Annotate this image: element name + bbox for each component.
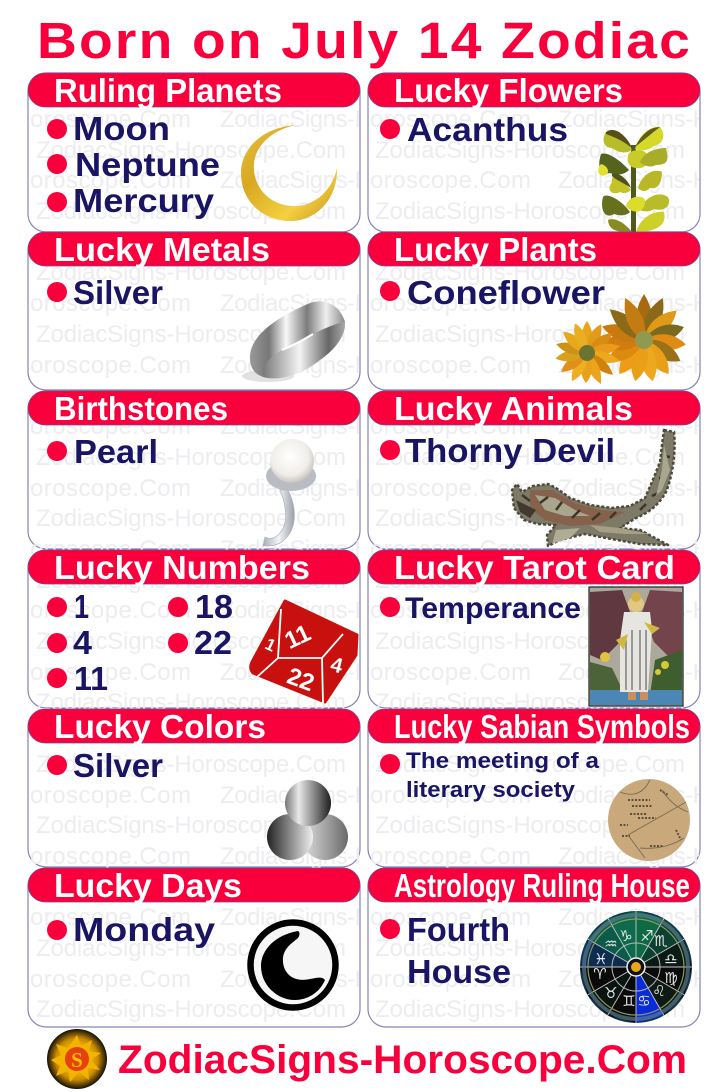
icon: red polyhedral die [251,601,357,703]
watermark left column [30,106,372,1023]
watermark left column: ZodiacSigns-H [220,475,372,502]
watermark left column: oroscope.Com [30,475,191,502]
icon: red polyhedral die: 4 [328,653,345,678]
watermark left column: oroscope.Com [30,904,191,931]
watermark right column: oroscope.Com [370,659,531,686]
watermark left column: ZodiacSigns-Horoscope.Com [36,137,346,164]
icon: zodiac house wheel: ♑ [619,927,633,945]
icon: zodiac house wheel: ♈ [593,965,607,983]
panel: ruling planets: Moon [73,110,170,147]
heading: lucky flowers: Lucky Flowers [394,72,623,109]
panel: astrology ruling house [368,867,700,1023]
watermark right column: oroscope.Com [370,904,531,931]
panel: ruling planets: Mercury [73,182,215,219]
watermark left column: oroscope.Com [30,167,191,194]
watermark right column: ZodiacSigns-Horoscope.Com [375,812,685,839]
panel: astrology ruling house: Fourth [407,911,510,948]
watermark right column: ZodiacSigns-Horoscope.Com [375,689,685,716]
watermark left column: ZodiacSigns-H [220,904,372,931]
icon: zodiac house wheel: ♋ [637,992,651,1010]
icon: red polyhedral die: 22 [283,663,318,697]
watermark left column: ZodiacSigns-H [220,597,372,624]
watermark right column: ZodiacSigns-Horoscope.Com [375,935,685,962]
watermark right column: ZodiacSigns-Horoscope.Com [375,567,685,594]
panel: lucky numbers [28,549,360,703]
icon: zodiac house wheel: ♊ [622,992,636,1010]
watermark left column: oroscope.Com [30,413,191,440]
watermark left column: oroscope.Com [30,290,191,317]
watermark right column: ZodiacSigns-Horoscope.Com [375,198,685,225]
watermark left column: ZodiacSigns-H [220,352,372,379]
watermark left column: ZodiacSigns-Horoscope.Com [36,198,346,225]
watermark right column: ZodiacSigns-Horoscope.Com [375,505,685,532]
icon: acanthus flower spike [598,127,669,232]
panel: ruling planets [28,72,360,221]
panel: lucky metals [28,231,360,382]
watermark right column: ZodiacSigns-Horoscope.Com [375,628,685,655]
panel: ruling planets: Neptune [75,146,220,183]
icon: zodiac house wheel: ♏ [654,932,668,950]
panel: lucky sabian symbols [368,708,700,861]
heading: birthstones: Birthstones [54,390,228,427]
watermark right column: oroscope.Com [370,290,531,317]
panel: lucky numbers: 18 [195,588,233,625]
panel: lucky plants: Coneflower [407,274,605,311]
watermark right column: ZodiacSigns-H [558,597,710,624]
watermark left column: ZodiacSigns-Horoscope.Com [36,505,346,532]
panel: lucky animals: Thorny Devil [405,432,615,469]
icon: zodiac house wheel: ♐ [640,927,654,945]
icon: zodiac house wheel: ♌ [652,982,666,1000]
watermark left column: ZodiacSigns-H [220,966,372,993]
watermark right column: ZodiacSigns-H [558,106,710,133]
watermark left column: ZodiacSigns-H [220,536,372,563]
watermark right column: ZodiacSigns-H [558,352,710,379]
heading: ruling planets: Ruling Planets [54,72,282,109]
panel: lucky days: Monday [73,911,216,948]
watermark left column: ZodiacSigns-Horoscope.Com [36,321,346,348]
watermark right column: oroscope.Com [370,597,531,624]
watermark left column: ZodiacSigns-Horoscope.Com [36,996,346,1023]
watermark left column: ZodiacSigns-Horoscope.Com [36,812,346,839]
watermark left column: ZodiacSigns-Horoscope.Com [36,444,346,471]
watermark left column: ZodiacSigns-H [220,290,372,317]
watermark right column: ZodiacSigns-H [558,843,710,870]
watermark right column: ZodiacSigns-Horoscope.Com [375,996,685,1023]
watermark left column: oroscope.Com [30,843,191,870]
panel: lucky metals: Silver [73,274,163,311]
panel: lucky flowers [368,72,700,232]
watermark right column: oroscope.Com [370,167,531,194]
icon: silver ring [242,301,345,382]
icon: sabian chart disc [608,779,690,861]
watermark left column: oroscope.Com [30,597,191,624]
watermark right column: ZodiacSigns-H [558,966,710,993]
panel: lucky animals [368,390,700,546]
watermark right column: oroscope.Com [370,413,531,440]
watermark left column: ZodiacSigns-H [220,106,372,133]
heading: lucky tarot card: Lucky Tarot Card [394,549,675,586]
icon: black crescent in circle [250,922,336,1008]
panel: birthstones: Pearl [74,433,158,470]
footer website name: ZodiacSigns-Horoscope.Com [118,1038,687,1082]
watermark left column: ZodiacSigns-H [220,659,372,686]
panel: lucky numbers: 11 [74,660,108,697]
watermark left column: oroscope.Com [30,966,191,993]
panel: lucky sabian symbols: The meeting of a [406,748,600,773]
watermark right column: ZodiacSigns-Horoscope.Com [375,444,685,471]
heading: lucky plants: Lucky Plants [394,231,597,268]
watermark right column: ZodiacSigns-H [558,413,710,440]
watermark right column: ZodiacSigns-H [558,290,710,317]
watermark right column [370,106,710,1023]
icon: red polyhedral die: 1 [262,634,279,656]
icon: zodiac house wheel: ♎ [664,950,678,968]
icon: zodiac house wheel: ♍ [664,969,678,987]
heading: lucky colors: Lucky Colors [54,708,266,745]
heading: lucky numbers: Lucky Numbers [54,549,310,586]
icon: thorny devil lizard [512,430,675,546]
watermark right column: ZodiacSigns-Horoscope.Com [375,259,685,286]
watermark left column: ZodiacSigns-H [220,782,372,809]
watermark right column: ZodiacSigns-H [558,475,710,502]
watermark right column: ZodiacSigns-H [558,904,710,931]
heading: lucky days: Lucky Days [54,867,242,904]
icon: pearl ring [263,439,316,546]
icon: zodiac house wheel [580,911,692,1023]
panel: lucky colors [28,708,360,860]
watermark left column: ZodiacSigns-H [220,843,372,870]
footer logo: sun emblem: S [71,1048,83,1072]
watermark left column: ZodiacSigns-Horoscope.Com [36,259,346,286]
panel: lucky colors: Silver [73,747,163,784]
watermark right column: oroscope.Com [370,475,531,502]
icon: golden crescent moon [241,125,337,221]
panel: lucky sabian symbols: literary society [406,777,576,802]
icon: zodiac house wheel: ♉ [604,984,618,1002]
icon: coneflowers [555,294,687,386]
panel: lucky numbers: 22 [194,624,232,661]
footer logo: sun emblem [47,1029,107,1089]
panel: astrology ruling house: House [407,953,511,990]
watermark right column: ZodiacSigns-Horoscope.Com [375,751,685,778]
watermark right column: ZodiacSigns-H [558,782,710,809]
icon: temperance tarot card [589,587,683,706]
watermark right column: ZodiacSigns-H [558,659,710,686]
watermark right column: ZodiacSigns-Horoscope.Com [375,321,685,348]
watermark left column: ZodiacSigns-Horoscope.Com [36,689,346,716]
panel: lucky tarot card: Temperance [405,592,581,625]
watermark left column: ZodiacSigns-Horoscope.Com [36,567,346,594]
watermark left column: ZodiacSigns-H [220,167,372,194]
panel: lucky numbers: 4 [73,624,93,661]
heading: lucky metals: Lucky Metals [54,231,270,268]
panel: lucky plants [368,231,700,386]
icon: zodiac house wheel: ♒ [604,935,618,953]
panel: lucky numbers: 1 [74,588,89,625]
watermark left column: ZodiacSigns-H [220,413,372,440]
watermark right column: ZodiacSigns-Horoscope.Com [375,137,685,164]
watermark right column: oroscope.Com [370,843,531,870]
icon: zodiac house wheel: ♓ [594,950,608,968]
watermark right column: oroscope.Com [370,352,531,379]
watermark right column: ZodiacSigns-H [558,536,710,563]
watermark right column: oroscope.Com [370,782,531,809]
panel: lucky tarot card [368,549,700,706]
watermark left column: ZodiacSigns-Horoscope.Com [36,935,346,962]
heading: lucky animals: Lucky Animals [394,390,633,427]
watermark right column: oroscope.Com [370,106,531,133]
watermark right column: oroscope.Com [370,536,531,563]
watermark left column: ZodiacSigns-Horoscope.Com [36,751,346,778]
watermark left column: oroscope.Com [30,106,191,133]
watermark left column: oroscope.Com [30,659,191,686]
icon: red polyhedral die: 11 [281,620,315,655]
watermark left column: oroscope.Com [30,782,191,809]
watermark right column: oroscope.Com [370,966,531,993]
watermark left column: oroscope.Com [30,536,191,563]
icon: three silver spheres [267,780,348,860]
watermark left column: oroscope.Com [30,352,191,379]
title: Born on July 14 Zodiac [37,12,692,69]
panel: birthstones [28,390,360,546]
panel: lucky flowers: Acanthus [407,111,568,148]
watermark right column: ZodiacSigns-H [558,167,710,194]
panel: lucky days [28,867,360,1008]
watermark left column: ZodiacSigns-Horoscope.Com [36,628,346,655]
